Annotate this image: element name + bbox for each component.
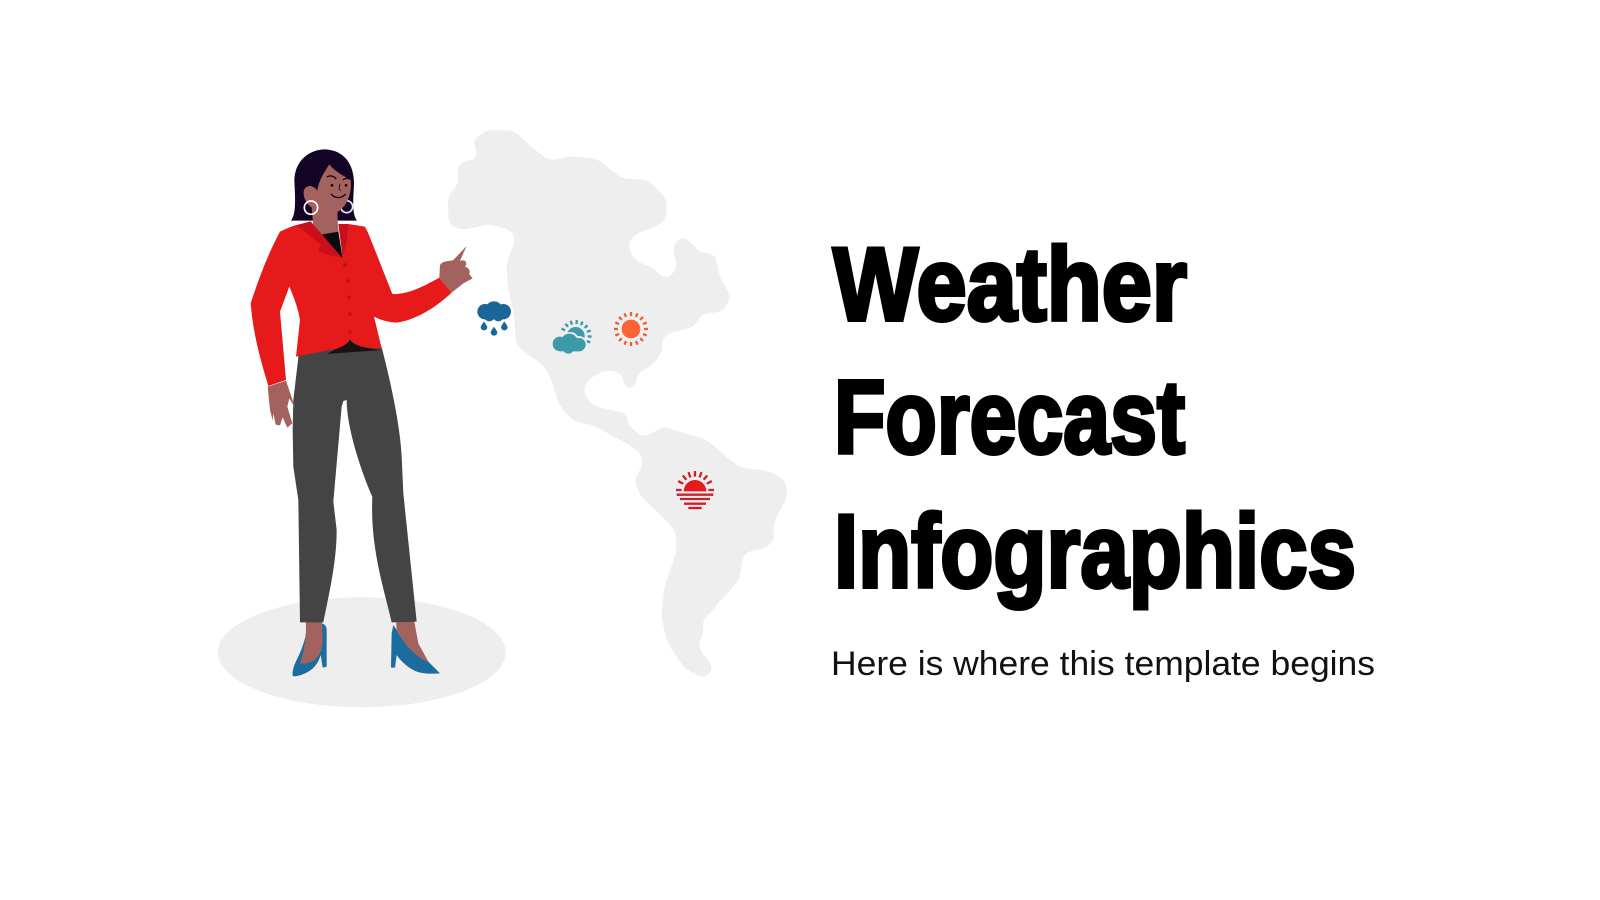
left earring [304,201,318,214]
trousers [293,337,417,622]
red blazer [251,224,452,386]
title [833,227,1356,610]
black top [313,227,343,258]
left hand [268,381,295,428]
subtitle: Here is where this template begins [831,645,1375,683]
title line 3: Infographics [834,494,1356,610]
character: woman presenting [251,149,473,676]
left shoe [293,623,327,676]
icon: rain cloud [477,301,511,336]
title line 2: Forecast [834,360,1185,476]
icon: sun behind cloud [553,320,592,354]
waist shadow [327,340,382,354]
map: the Americas with weather icons [447,129,787,679]
icon: orange sun [614,312,648,346]
legs and shoes [293,620,440,676]
lapels [297,221,348,258]
face and neck [304,164,351,257]
ground shadow ellipse [218,597,506,707]
ankles [300,620,428,664]
icon: red sunset [676,471,714,508]
facial features [327,176,349,198]
hair [291,149,357,221]
title line 1: Weather [833,227,1187,343]
blazer buttons [343,263,352,334]
map silhouette [447,129,787,679]
pointing hand [439,246,473,293]
right shoe [391,625,440,674]
right earring [341,201,353,213]
